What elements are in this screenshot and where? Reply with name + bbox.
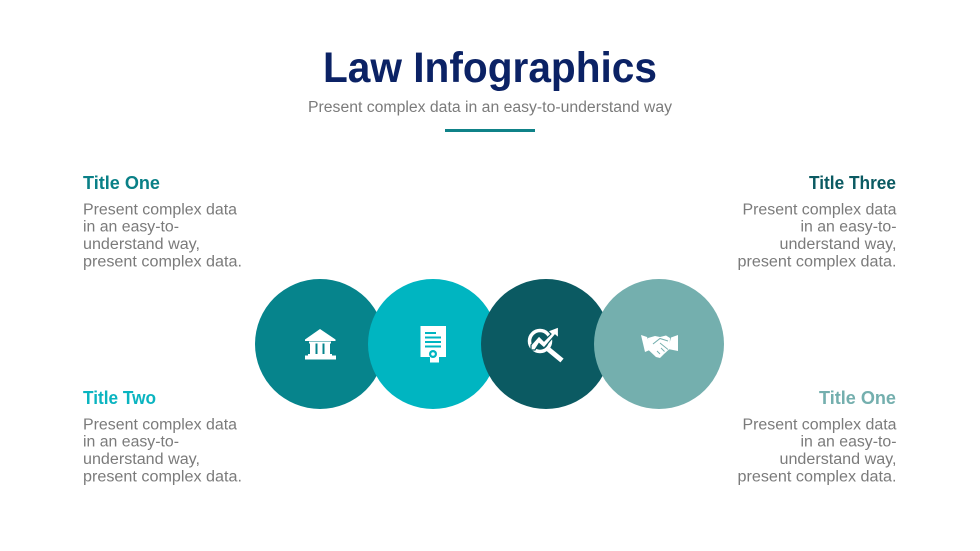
text block: Title Two bottom left: present complex data. (83, 468, 242, 486)
text block: Title Two bottom left: in an easy-to- (83, 434, 179, 450)
text block: Title One bottom right: understand way, (780, 451, 896, 468)
subtitle: Present complex data in an easy-to-understand way (308, 99, 672, 116)
title: Law Infographics (323, 44, 657, 92)
circle 2 (368, 279, 498, 409)
title underline (445, 129, 535, 132)
text block: Title One top left (83, 172, 242, 270)
text block: Title Three top right: Title Three (809, 172, 896, 193)
text block: Title One bottom right: Present complex data (742, 416, 897, 434)
text block: Title Three top right: in an easy-to- (800, 218, 896, 236)
circle 1 (255, 279, 385, 409)
text block: Title One top left: present complex data. (83, 254, 242, 270)
text block: Title Three top right: understand way, (780, 236, 896, 253)
text block: Title One top left: Title One (83, 172, 160, 193)
icon: courthouse (305, 329, 336, 360)
icon: handshake (641, 335, 678, 358)
text block: Title Two bottom left: Title Two (83, 387, 156, 408)
text block: Title Two bottom left (83, 387, 242, 486)
text block: Title Two bottom left: Present complex data (83, 416, 237, 434)
text block: Title Three top right (738, 172, 897, 270)
icon: certificate document (420, 326, 446, 362)
text block: Title Three top right: Present complex data (742, 202, 897, 218)
circle 4 (594, 279, 724, 409)
text block: Title Two bottom left: understand way, (83, 451, 200, 468)
text block: Title One bottom right: in an easy-to- (800, 434, 896, 450)
icon: magnifier with growth arrow (530, 327, 562, 360)
text block: Title One bottom right: Title One (819, 387, 896, 408)
text block: Title One top left: in an easy-to- (83, 218, 179, 236)
text block: Title One top left: Present complex data (83, 202, 237, 218)
text block: Title One bottom right (738, 387, 897, 486)
text block: Title One bottom right: present complex data. (738, 468, 896, 486)
text block: Title One top left: understand way, (83, 236, 200, 253)
text block: Title Three top right: present complex data. (738, 254, 896, 270)
circle 3 (481, 279, 611, 409)
